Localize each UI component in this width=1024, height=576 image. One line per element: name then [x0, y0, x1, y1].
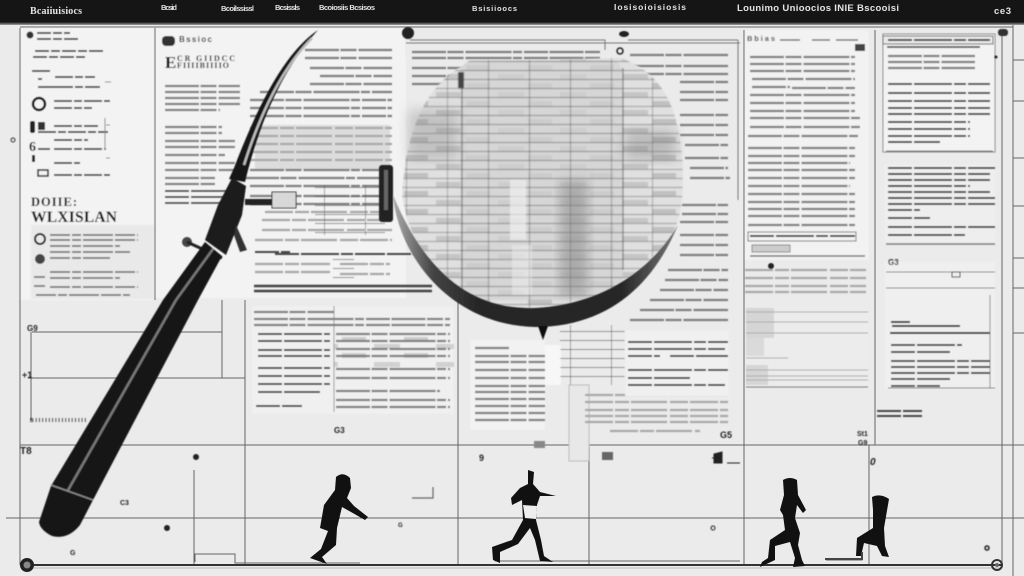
small markers: T8 — [20, 446, 32, 457]
panel: middle lower text — [470, 325, 732, 461]
panel: column five top — [883, 29, 1008, 152]
header logo and title: Bcaiiuisiocs — [30, 6, 82, 17]
heading block — [162, 35, 235, 72]
small markers: 0 — [870, 457, 876, 468]
list items with icons — [29, 71, 111, 176]
header nav items: Bcoiosiis Bcsisos — [319, 3, 375, 12]
small markers: G — [398, 523, 403, 529]
sub-panel with round icons — [31, 225, 154, 299]
silhouette: person two — [492, 470, 556, 563]
header nav items: ce3 — [994, 6, 1011, 17]
header nav items: Iosisoioisiosis — [614, 2, 686, 12]
small markers: +1 — [22, 370, 32, 380]
small markers: G9 — [858, 440, 867, 447]
panel: central dense text behind lens arm — [245, 50, 440, 291]
small markers: C3 — [120, 500, 129, 507]
large heading — [31, 195, 117, 226]
small tag — [534, 441, 545, 448]
heading block: CR GIIDCC — [177, 54, 235, 63]
header nav items: Bcsissls — [275, 3, 300, 12]
heading block: Bssioc — [179, 35, 213, 44]
large heading: DOIIE: — [31, 195, 77, 209]
list items with icons: 6 — [29, 140, 36, 155]
silhouette: seated figure — [825, 495, 889, 559]
icon: top badge — [26, 32, 34, 38]
lens clip — [379, 165, 393, 222]
column heading: Bbias — [747, 34, 775, 43]
header nav items: Bsisiioocs — [472, 4, 517, 13]
header nav items: Lounimo Unioocios INIE Bscooisi — [737, 3, 899, 14]
silhouette: person one — [310, 474, 368, 564]
panel: column five lower: G3 — [888, 258, 899, 267]
header nav items — [161, 2, 1011, 17]
header nav items: Bcoilssissl — [221, 4, 254, 13]
panel: column four — [745, 30, 869, 260]
panel: column four chart — [745, 263, 868, 387]
small caption — [877, 411, 922, 416]
magnifying glass — [39, 30, 678, 537]
handle highlight — [67, 249, 213, 492]
text block — [165, 86, 240, 110]
panel: column five middle — [885, 165, 995, 245]
small markers: BIIIIIIIIIIIIIIII — [30, 418, 87, 424]
panel: middle lower text: G5 — [720, 430, 732, 440]
heading block: FIIIIBIIIIO — [177, 61, 229, 70]
panel: lower center table — [252, 306, 454, 435]
clamp — [182, 178, 296, 258]
arm highlight — [244, 38, 312, 165]
small tag: G3 — [334, 426, 345, 435]
icon: corner medallions — [20, 558, 1002, 572]
panel: second column text — [156, 28, 406, 298]
handle — [51, 242, 222, 500]
curved arm — [229, 30, 318, 182]
heading block: E — [165, 53, 176, 72]
header nav items: Bcsid — [161, 3, 177, 12]
panel: left column — [21, 28, 154, 300]
lens: magnified area — [402, 27, 740, 320]
column heading — [747, 34, 865, 51]
small markers: 9 — [479, 453, 484, 463]
small markers: G — [70, 550, 76, 557]
lens ring — [393, 195, 678, 340]
panel: column five lower — [877, 258, 995, 416]
header bar — [0, 0, 1024, 25]
large heading: WLXISLAN — [31, 209, 117, 226]
silhouette: person three — [760, 478, 806, 567]
small markers: St1 — [857, 431, 868, 438]
handle end cap — [39, 485, 93, 537]
intro lines — [33, 33, 105, 57]
small markers: G9 — [27, 324, 38, 333]
